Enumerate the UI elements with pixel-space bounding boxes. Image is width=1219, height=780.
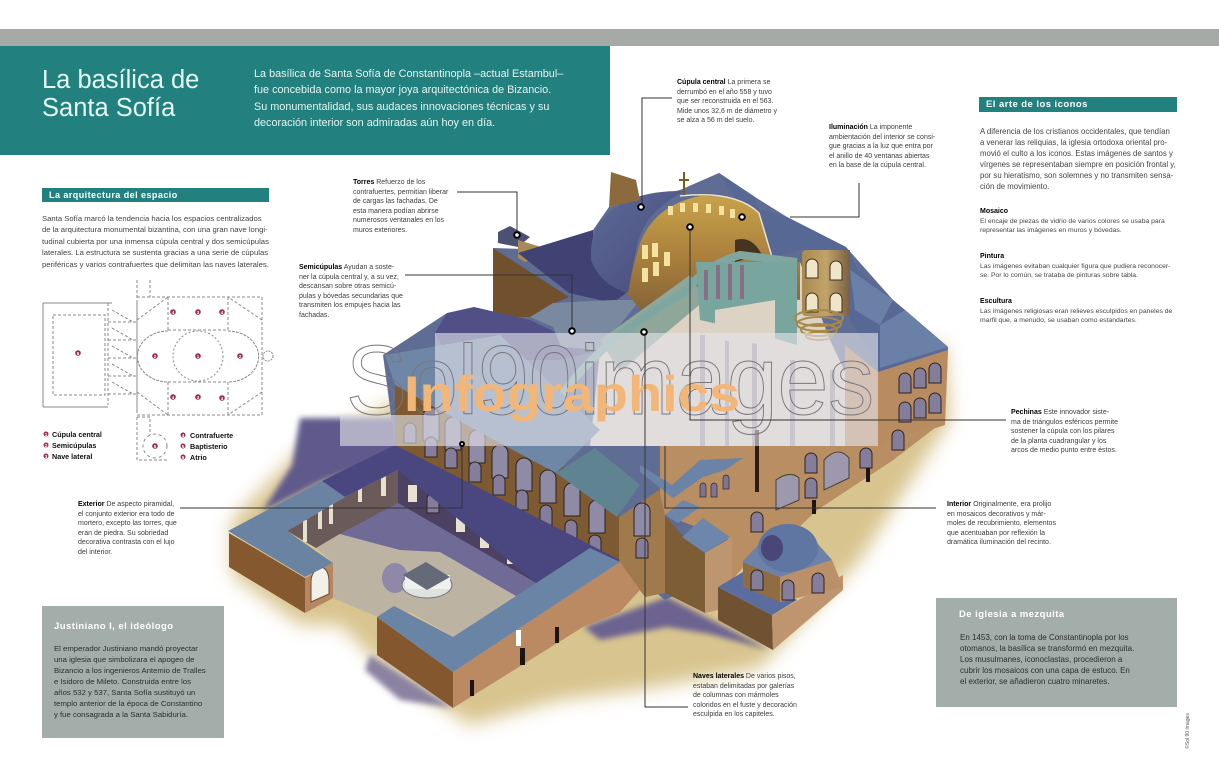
pintura: Pintura [980, 253, 1004, 260]
callout: semicúpulas: ner la cúpula central y, a su vez, [299, 274, 399, 280]
courtyard shadow [336, 498, 545, 596]
floor plan numbered markers: 4 [172, 310, 175, 315]
fountain shadow [382, 563, 408, 593]
nave windows [404, 408, 605, 555]
ground and shadows [232, 340, 950, 725]
floor plan numbered markers: 6 [77, 351, 80, 356]
callout: exterior: del interior. [78, 548, 112, 556]
text: architecture: Santa Sofía marcó la tendencia hacia los espacios centralizados [42, 214, 262, 223]
left wing roof [228, 481, 345, 577]
round tower [802, 250, 850, 316]
callout: exterior: mortero, excepto las torres, que [78, 520, 177, 527]
intro text: La basílica de Santa Sofía de Constantinopla –actual Estambul– [254, 68, 563, 80]
callout: iluminación [829, 124, 935, 169]
callout: pechinas: sostener la cúpula con los pilares [1011, 428, 1115, 435]
intro text: Su monumentalidad, sus audaces innovaciones técnicas y su [254, 101, 549, 113]
callout: naves laterales: coloridos en el fuste y decoración [693, 702, 797, 708]
heading: architecture [42, 188, 269, 202]
text: iconos: A diferencia de los cristianos occidentales, que tendían [980, 127, 1170, 136]
callout: exterior: Exterior De aspecto piramidal, [78, 501, 174, 508]
text: architecture: de la arquitectura monumental bizantina, con una gran nave longi- [42, 225, 268, 234]
title: Santa Sofía [42, 94, 175, 122]
title [42, 66, 199, 122]
callout: torres: esta manera podían abrirse [353, 208, 439, 214]
title: La basílica de [42, 66, 199, 94]
text: Justiniano: El emperador Justiniano mandó proyectar [54, 644, 198, 653]
text: Justiniano: y fue consagrada a la Santa Sabiduría. [54, 710, 188, 719]
escultura: Las imágenes religiosas eran relieves esculpidos en paneles de [980, 308, 1172, 315]
callout: exterior [78, 500, 177, 556]
text: architecture [42, 214, 269, 269]
mosaico: Mosaico [980, 208, 1008, 215]
heading: Justiniano: Justiniano I, el ideólogo [54, 621, 173, 632]
callout: torres: muros exteriores. [353, 226, 407, 234]
text: iconos: vírgenes se representaban siempre en posición frontal y, [980, 160, 1176, 169]
outer half dome shell [591, 191, 684, 293]
watermark label: Infographics [404, 366, 740, 422]
left wing wall [229, 533, 305, 613]
front wing walls [377, 617, 453, 708]
floor plan numbered markers: 2 [45, 443, 48, 448]
spiral ramp [795, 310, 843, 340]
back dark roof [322, 445, 620, 590]
legend left: Nave lateral [52, 452, 92, 461]
text: Justiniano [54, 644, 206, 719]
text: mezquita [960, 633, 1134, 686]
text: mezquita: otomanos, la basílica se transformó en mezquita. [960, 644, 1134, 653]
low domes [435, 307, 600, 360]
floor plan numbered markers: 4 [182, 433, 185, 438]
cross [679, 172, 689, 195]
arcade walls [287, 470, 398, 548]
floor plan numbered markers: 3 [197, 310, 200, 315]
callout: exterior: el conjunto exterior era todo de [78, 510, 175, 518]
text: Justiniano: e Isidoro de Mileto. Construida entre los [54, 677, 191, 686]
text: Justiniano: templo anterior de la época de Constantino [54, 699, 202, 708]
callout: iluminación: ambientación del interior se consi- [829, 134, 935, 140]
escultura [980, 298, 1172, 324]
legend right: Atrio [190, 453, 207, 462]
panel: el arte de los iconos [979, 97, 1177, 324]
legend left: Semicúpulas [52, 441, 96, 450]
callout: iluminación: Iluminación La imponente [829, 124, 912, 131]
heading: mezquita: De iglesia a mezquita [959, 609, 1065, 620]
text: architecture: laterales. La estructura se sustenta gracias a una serie de cúpulas [42, 248, 268, 257]
header panel [0, 46, 610, 155]
heading: architecture: La arquitectura del espacio [49, 190, 178, 200]
building backing mass [383, 173, 948, 600]
callout: torres: Torres Refuerzo de los [353, 179, 425, 186]
front wing roof [377, 548, 620, 672]
callout: pechinas [1011, 408, 1118, 454]
teal gallery [562, 255, 797, 395]
callout: cúpula central: Cúpula central La primera se [677, 79, 770, 86]
text: iconos [980, 127, 1176, 191]
nave wall [395, 385, 620, 565]
legend right: Contrafuerte [190, 431, 233, 440]
callout: interior: que acentuaban por reflexión la [947, 530, 1045, 536]
baptistery base [718, 587, 773, 650]
baptistery plan [137, 417, 167, 460]
callout: pechinas: de la planta cuadrangular y los [1011, 438, 1106, 444]
callout: exterior: decorativa contrasta con el lujo [78, 539, 174, 546]
callout: interior [947, 500, 1056, 546]
callout: naves laterales [693, 672, 797, 718]
mosaico: El encaje de piezas de vidrio de varios colores se usaba para [980, 218, 1165, 225]
gold dome interior [626, 196, 800, 320]
escultura: marfil que, a menudo, se usaban como estandartes. [980, 317, 1137, 324]
mosaico [980, 208, 1165, 234]
text: iconos: movió el culto a los iconos. Estas imágenes de santos y [980, 149, 1173, 158]
callout: iluminación: el anillo de 40 ventanas abiertas [829, 152, 929, 160]
callout: iluminación: gue gracias a la luz que entra por [829, 143, 933, 150]
text: iconos: ción de movimiento. [980, 182, 1049, 191]
atrium [228, 445, 640, 708]
legend left: Cúpula central [52, 430, 102, 439]
callout: interior: Interior Originalmente, era prolijo [947, 501, 1051, 508]
panel: De iglesia a mezquita [936, 598, 1177, 707]
floor plan numbered markers: 2 [154, 354, 157, 359]
narthex plan [108, 303, 137, 410]
watermark [340, 325, 878, 446]
callout: naves laterales: de columnas con mármoles [693, 692, 779, 699]
callout: semicúpulas [299, 264, 403, 318]
arcade band [600, 275, 705, 372]
dome window lights [642, 203, 735, 282]
pintura: Las imágenes evitaban cualquier figura que pudiera reconocer- [980, 263, 1170, 270]
text: architecture: periféricas y varios contrafuertes que delimitan las naves laterales. [42, 260, 269, 269]
heading: iconos [979, 97, 1177, 112]
right blue roofs [719, 173, 948, 372]
leader lines [180, 98, 1006, 707]
callout: torres: de cargas las fachadas. De [353, 198, 438, 205]
text: Justiniano: Bizancio a los ingenieros Antemio de Tralles [54, 666, 206, 675]
callout: interior: dramática iluminación del recinto. [947, 539, 1051, 546]
floor plan numbered markers: 1 [45, 432, 48, 437]
callout: semicúpulas: Semicúpulas Ayudan a soste- [299, 264, 394, 271]
floor plan numbered markers: 5 [182, 444, 185, 449]
callout: naves laterales: esculpida en los capiteles. [693, 711, 775, 718]
callout: cúpula central: Mide unos 32,6 m de diámetro y [677, 108, 777, 114]
floor plan numbered markers: 5 [154, 444, 157, 449]
callout: naves laterales: estaban delimitadas por galerías [693, 682, 794, 690]
left tower [498, 226, 530, 247]
gable wall [619, 490, 665, 597]
text: mezquita: Los musulmanes, iconoclastas, procedieron a [960, 655, 1122, 664]
callout: semicúpulas: fachadas. [299, 312, 329, 318]
credit: ©Sol 90 Images [1185, 713, 1191, 749]
baptistery dome [742, 527, 832, 577]
callout: iluminación: en la base de la cúpula central. [829, 162, 926, 169]
callout: cúpula central: que ser reconstruida en el 563. [677, 98, 774, 105]
pintura: se. Por lo común, se trataba de pinturas sobre tabla. [980, 272, 1138, 279]
callout: torres: contrafuertes, permitían liberar [353, 188, 448, 196]
callout: interior: en mosaicos decorativos y már- [947, 510, 1046, 518]
callout: cúpula central: derrumbó en el año 558 y tuvo [677, 88, 772, 96]
floor plan numbered markers: 4 [221, 396, 224, 401]
intro text: decoración interior son admiradas aún hoy en día. [254, 117, 495, 129]
callout: interior: moles de recubrimiento, elementos [947, 520, 1056, 527]
callout: cúpula central: se alza a 56 m del suelo. [677, 117, 754, 124]
watermark brand: Sol90images [346, 325, 874, 435]
interior [590, 262, 880, 446]
intro text: fue concebida como la mayor joya arquitectónica de Bizancio. [254, 84, 551, 96]
east wing wall [660, 420, 945, 580]
callout: torres: numerosos ventanales en los [353, 217, 444, 224]
east upper wall [845, 345, 948, 446]
atrium courtyard floor [315, 500, 540, 637]
text: iconos: a venerar las reliquias, la iglesia ortodoxa oriental pro- [980, 138, 1167, 147]
callout: cúpula central [677, 78, 777, 124]
floor plan numbered markers: 3 [197, 395, 200, 400]
text: iconos: por su hieratismo, son solemnes y no transmiten sensa- [980, 171, 1173, 180]
fountain pavilion [402, 562, 452, 598]
nave roofs [385, 335, 600, 473]
floor plan numbered markers: 2 [239, 354, 242, 359]
legend right [190, 431, 233, 462]
text: Justiniano: una iglesia que simbolizara el apogeo de [54, 655, 194, 664]
top tower [609, 172, 640, 207]
text: architecture: tudinal cubierta por una inmensa cúpula central y dos semicúpulas [42, 237, 269, 246]
floor plan numbered markers: 4 [172, 395, 175, 400]
legend left [52, 430, 102, 461]
atrium plan [43, 303, 112, 407]
callout: naves laterales: Naves laterales De varios pisos, [693, 673, 796, 680]
callout: semicúpulas: descansan sobre otras semicú- [299, 283, 396, 290]
floor plan numbered markers: 3 [45, 454, 48, 459]
main block and dome [435, 172, 948, 446]
text: mezquita: En 1453, con la toma de Constantinopla por los [960, 633, 1129, 642]
tower block [665, 515, 705, 613]
nave wing [385, 335, 743, 597]
callout: semicúpulas: transmiten los empujes hacia las [299, 302, 401, 309]
floor plan [43, 280, 273, 460]
callout: semicúpulas: pulas y bóvedas secundarias que [299, 292, 403, 300]
pintura [980, 252, 1170, 279]
panel: Justiniano [42, 606, 224, 738]
heading: iconos: El arte de los iconos [986, 99, 1088, 110]
intro text [254, 68, 564, 129]
callout: torres [353, 178, 448, 234]
floor plan numbered markers: 4 [221, 310, 224, 315]
legend right: Baptisterio [190, 442, 228, 451]
nave plan [137, 280, 262, 415]
leader markers [460, 204, 745, 446]
floor plan numbered markers: 6 [182, 455, 185, 460]
top grey band [0, 29, 1219, 46]
callout: exterior: eran de piedra. Su sobriedad [78, 530, 168, 536]
text: mezquita: cubrir los mosaicos con una capa de estuco. En [960, 666, 1130, 675]
mosaico: representar las imágenes en muros y bóvedas. [980, 227, 1122, 234]
text: mezquita: el exterior, se añadieron cuatro minaretes. [960, 677, 1109, 686]
east wing and baptistery [660, 420, 945, 650]
text: Justiniano: años 532 y 537, Santa Sofía sustituyó un [54, 688, 195, 697]
watermark panel [340, 333, 878, 446]
callout: pechinas: arcos de medio punto entre éstos. [1011, 447, 1117, 454]
callout: pechinas: Pechinas Este innovador siste- [1011, 409, 1109, 416]
floor plan numbered markers: 1 [197, 354, 200, 359]
baptistery drum [743, 562, 780, 602]
callout: pechinas: ma de triángulos esféricos permite [1011, 418, 1118, 426]
escultura: Escultura [980, 298, 1012, 305]
floor plan numbered markers [44, 309, 243, 460]
